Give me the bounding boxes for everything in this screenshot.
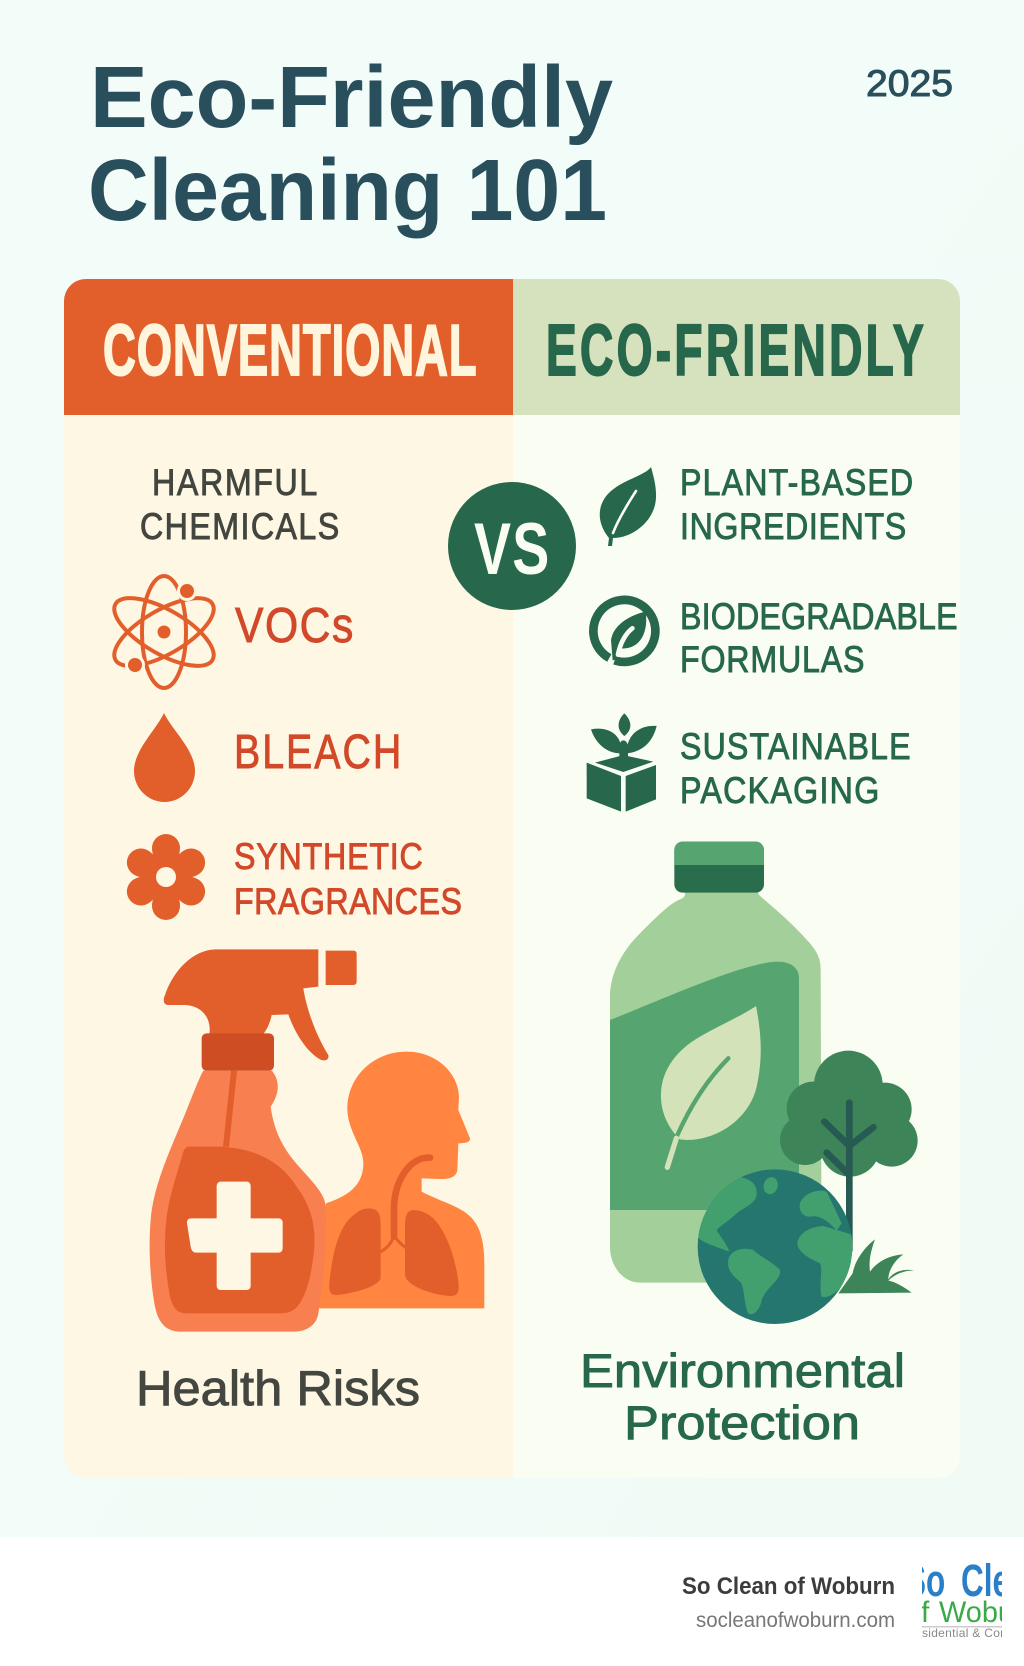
illustration: green bottle, tree and earth	[610, 842, 918, 1324]
header: eco-friendly	[513, 279, 960, 415]
label: plant-based ingredients: PLANT-BASED	[680, 463, 913, 504]
icon: biodegradable leaf ring	[593, 600, 655, 662]
label: bleach: BLEACH	[234, 725, 401, 779]
illustration: spray bottle and lungs	[150, 949, 484, 1332]
label: biodegradable formulas: FORMULAS	[680, 640, 864, 681]
icon: atom	[105, 576, 223, 688]
earth	[697, 1169, 853, 1324]
title: Eco-Friendly	[90, 49, 613, 146]
title	[88, 49, 613, 239]
VS badge: VS	[474, 508, 549, 590]
label: biodegradable formulas: BIODEGRADABLE	[680, 597, 958, 638]
label: VOCs: VOCs	[235, 597, 353, 653]
bottle	[610, 842, 822, 1283]
footer brand text: So Clean of Woburn	[682, 1573, 895, 1600]
title: Cleaning 101	[88, 142, 607, 239]
icon: drop	[134, 713, 195, 802]
year label: 2025	[866, 63, 953, 104]
caption: environmental protection: Protection	[624, 1396, 860, 1449]
panel: eco-friendly	[513, 279, 960, 1478]
header: eco-friendly: ECO-FRIENDLY	[546, 309, 924, 390]
caption: environmental protection: Environmental	[580, 1344, 905, 1397]
label: synthetic fragrances: FRAGRANCES	[234, 882, 462, 923]
person with lungs	[313, 1052, 484, 1308]
heading: harmful chemicals	[140, 463, 339, 548]
footer brand text	[682, 1573, 895, 1632]
label: synthetic fragrances: SYNTHETIC	[234, 837, 423, 878]
footer logo: So	[905, 1557, 945, 1606]
caption: environmental protection	[580, 1344, 905, 1449]
footer brand text: socleanofwoburn.com	[696, 1609, 895, 1632]
footer logo: f	[921, 1596, 930, 1629]
label: sustainable packaging: PACKAGING	[680, 771, 879, 812]
label: plant-based ingredients	[680, 463, 913, 548]
heading: harmful chemicals: CHEMICALS	[140, 507, 339, 548]
footer logo: Wobu	[939, 1596, 1014, 1629]
header: conventional	[64, 279, 513, 415]
icon: leaf	[600, 467, 656, 546]
label: biodegradable formulas	[680, 597, 958, 681]
spray bottle	[150, 949, 357, 1332]
footer logo	[922, 1563, 1002, 1637]
label: plant-based ingredients: INGREDIENTS	[680, 507, 906, 548]
icon: box with sprout	[587, 713, 657, 812]
heading: harmful chemicals: HARMFUL	[152, 463, 317, 504]
tree	[780, 1051, 918, 1293]
icon: flower	[122, 834, 210, 920]
caption: health risks: Health Risks	[136, 1362, 420, 1416]
label: sustainable packaging: SUSTAINABLE	[680, 727, 911, 768]
label: sustainable packaging	[680, 727, 911, 812]
label: synthetic fragrances	[234, 837, 462, 923]
VS badge	[448, 482, 576, 610]
panel: conventional	[64, 279, 513, 1478]
header: conventional: CONVENTIONAL	[103, 310, 477, 391]
